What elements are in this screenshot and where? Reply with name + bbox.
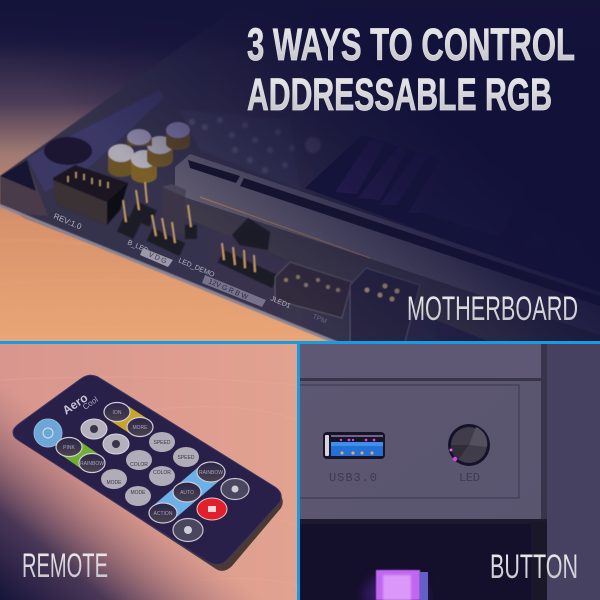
- PCIe slot: [175, 154, 600, 342]
- LED button: [448, 424, 490, 466]
- brightness buttons: [173, 478, 249, 542]
- mode buttons: COLOR: [153, 470, 171, 476]
- mode buttons: MODE: [130, 490, 146, 496]
- title: [247, 19, 575, 120]
- pin header: [53, 165, 128, 225]
- mode buttons: COLOR: [130, 462, 148, 468]
- remote control: Cool: [81, 395, 100, 412]
- dark buttons: ION: [113, 410, 122, 416]
- brand: Aero: [60, 391, 90, 417]
- mode buttons: [101, 432, 199, 506]
- dark buttons: RAINBOW: [80, 461, 104, 467]
- silkscreen labels: TPM: [311, 313, 328, 326]
- dark buttons: PINK: [63, 445, 75, 451]
- mode buttons: SPEED: [154, 440, 171, 446]
- lock button: [197, 498, 227, 520]
- mode buttons: SPEED: [178, 455, 195, 461]
- dark buttons: MORE: [132, 425, 148, 431]
- header pins: [117, 182, 278, 288]
- USB label: USB3.0: [329, 471, 377, 485]
- panel: button photo: [300, 344, 600, 600]
- remote control: [13, 375, 283, 571]
- dark buttons: ACTION: [154, 511, 173, 517]
- panel: remote photo: [0, 344, 297, 600]
- USB port: [323, 432, 385, 459]
- pink wood background: [0, 344, 297, 600]
- panel: motherboard photo: [0, 45, 600, 341]
- silkscreen labels: [52, 212, 328, 326]
- silkscreen labels: B_LED: [126, 239, 149, 255]
- fan buttons: [81, 419, 129, 454]
- capacitors: [108, 122, 190, 183]
- wood desk: [0, 44, 330, 341]
- jumper: [162, 184, 270, 250]
- purple light: [376, 570, 428, 600]
- power button: [34, 419, 62, 447]
- silkscreen labels: REV:1.0: [52, 212, 83, 232]
- dark buttons: AUTO: [180, 490, 194, 496]
- silkscreen labels: V D G: [147, 251, 168, 265]
- heatsink: [305, 150, 421, 230]
- dark buttons: RAINBOW: [199, 470, 223, 476]
- mode buttons: MODE: [106, 480, 122, 486]
- blue dividers: [0, 341, 600, 600]
- silkscreen labels: JLED1: [269, 295, 291, 310]
- circuit detail: [188, 116, 320, 174]
- LED label: LED: [459, 471, 480, 485]
- coloured bands: [69, 412, 211, 513]
- silkscreen labels: 12V G R B W: [207, 278, 249, 301]
- right headers: [275, 262, 420, 342]
- dark buttons: [56, 402, 225, 523]
- silkscreen labels: LED_DEMO: [177, 257, 216, 279]
- motherboard body: [0, 86, 600, 341]
- case background: [300, 344, 600, 600]
- label: remote: REMOTE: [22, 547, 108, 585]
